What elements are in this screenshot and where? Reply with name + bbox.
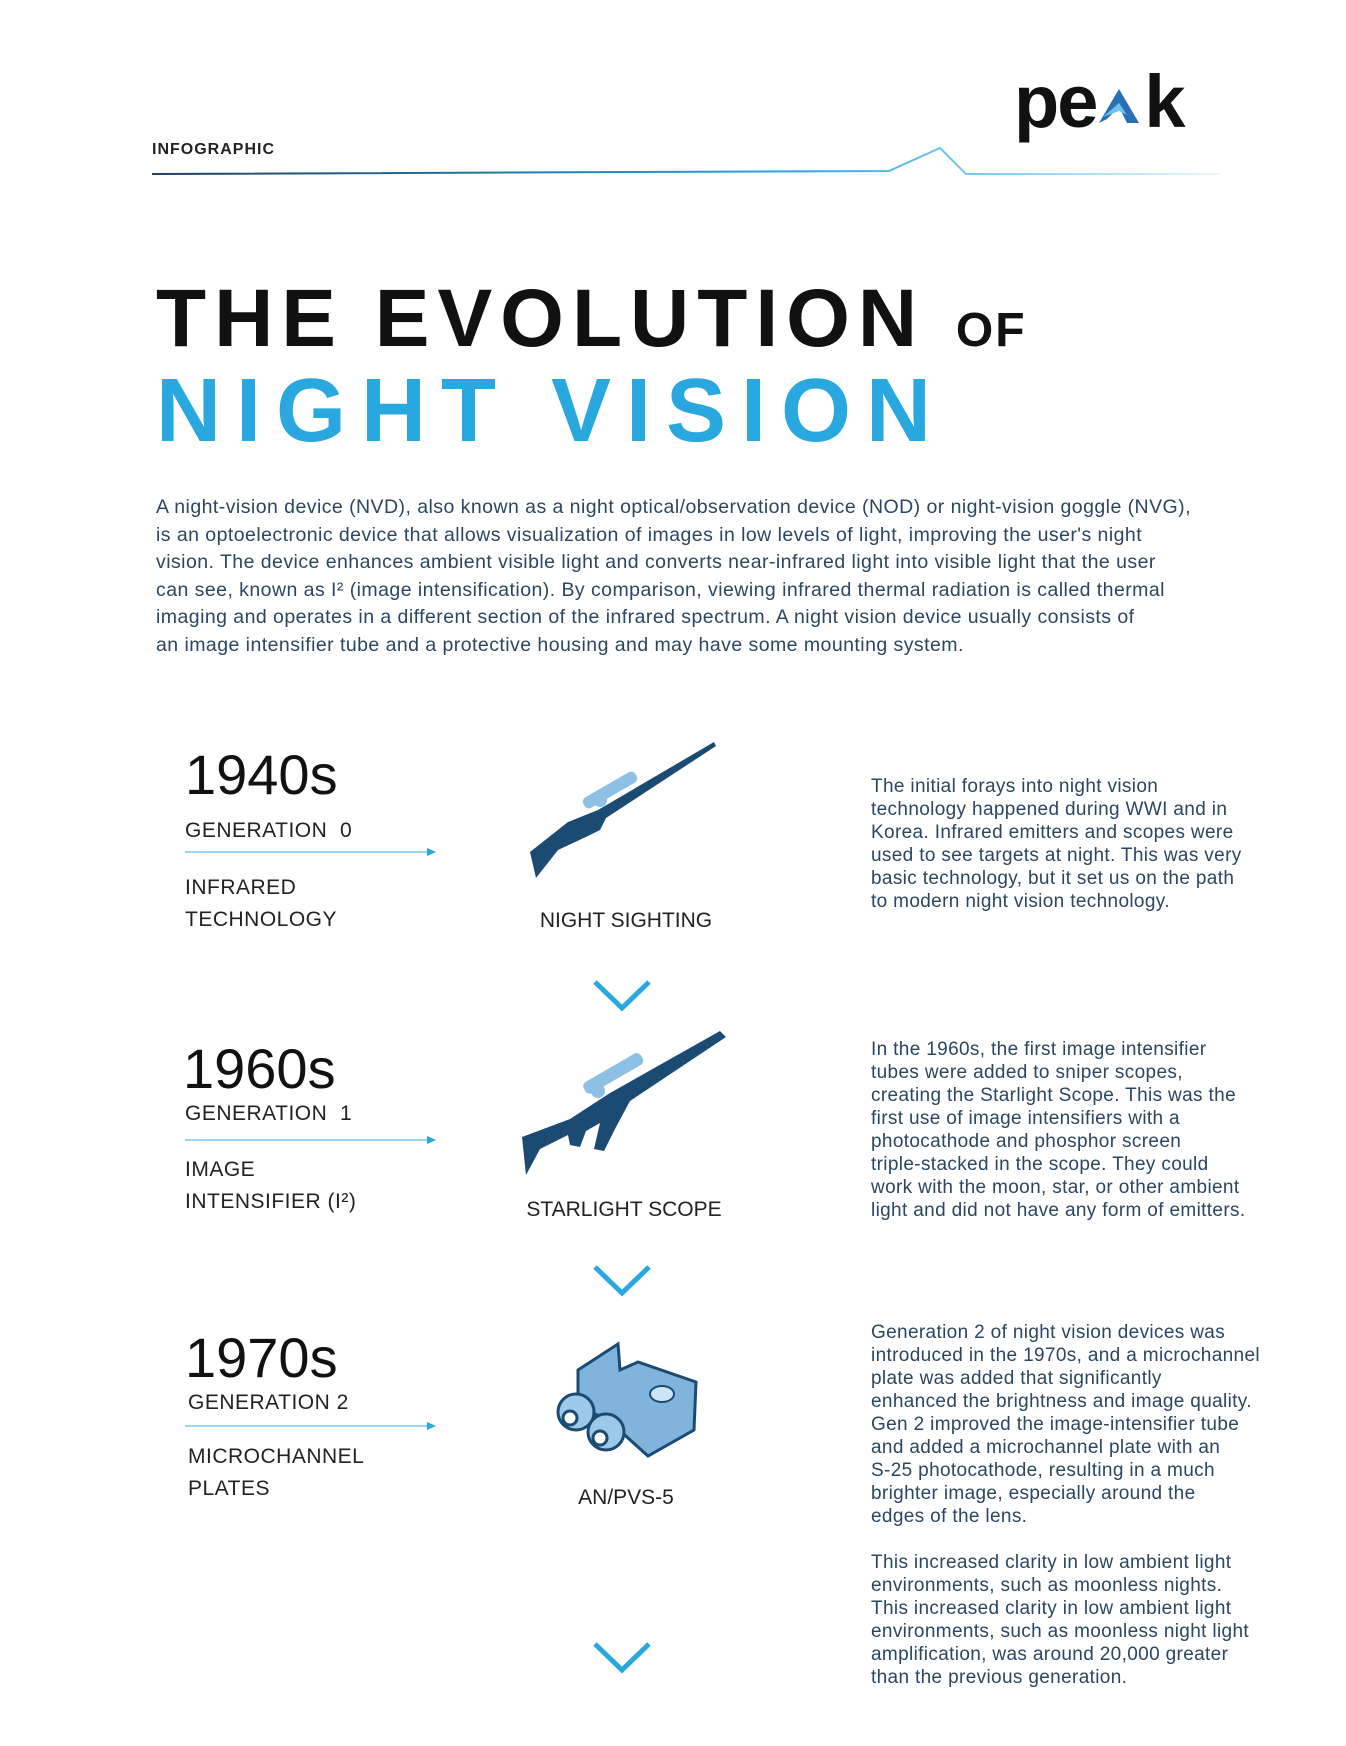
logo: peak: pe k <box>1014 60 1184 143</box>
text: 1960s description: In the 1960s, the first image intensifier <box>871 1039 1206 1060</box>
text: 1960s description: triple-stacked in the scope. They could <box>871 1154 1209 1175</box>
intro paragraph: A night-vision device (NVD), also known as a night optical/observation device (NOD) or night-vision goggle (NVG), <box>156 496 1191 518</box>
text: 1970s description: than the previous generation. <box>871 1667 1127 1688</box>
text: 1970s description: introduced in the 1970s, and a microchannel <box>871 1345 1260 1366</box>
panel: 1970s: 1970s <box>185 1326 338 1389</box>
icon: night sighting rifle <box>530 742 716 878</box>
text: 1940s description: to modern night vision technology. <box>871 891 1170 912</box>
text: 1960s description: creating the Starlight Scope. This was the <box>871 1085 1236 1106</box>
label: infographic: INFOGRAPHIC <box>152 141 275 158</box>
text: 1960s description <box>871 1039 1245 1221</box>
intro paragraph <box>156 496 1191 656</box>
arrow <box>185 1136 436 1144</box>
panel: 1960s <box>183 1037 436 1213</box>
title: THE EVOLUTION OF <box>156 273 1027 364</box>
panel: 1940s: 1940s <box>185 743 338 806</box>
panel: 1970s <box>185 1326 436 1500</box>
icon: starlight scope rifle <box>522 1031 726 1175</box>
text: 1970s description: This increased clarity in low ambient light <box>871 1598 1231 1619</box>
arrow <box>185 1422 436 1430</box>
header line with peak <box>152 146 1220 175</box>
title <box>156 273 1027 461</box>
text: 1960s description: tubes were added to sniper scopes, <box>871 1062 1183 1083</box>
panel: 1970s: PLATES <box>188 1477 270 1500</box>
text: 1960s description: photocathode and phosphor screen <box>871 1131 1181 1152</box>
text: 1970s description: S-25 photocathode, resulting in a much <box>871 1460 1215 1481</box>
intro paragraph: can see, known as I² (image intensification). By comparison, viewing infrared thermal radiation is called thermal <box>156 578 1165 600</box>
text: 1970s description: environments, such as moonless nights. <box>871 1575 1222 1596</box>
caption: AN/PVS-5: AN/PVS-5 <box>578 1486 674 1509</box>
panel: 1940s: INFRARED <box>185 876 296 899</box>
text: 1940s description: technology happened during WWI and in <box>871 799 1227 820</box>
text: 1960s description: first use of image intensifiers with a <box>871 1108 1180 1129</box>
text: 1970s description: amplification, was around 20,000 greater <box>871 1644 1228 1665</box>
intro paragraph: imaging and operates in a different section of the infrared spectrum. A night vision device usually consists of <box>156 606 1135 628</box>
panel: 1960s: 1960s <box>183 1037 336 1100</box>
arrow: chevron 3 <box>593 1642 651 1674</box>
text: 1940s description <box>871 776 1242 912</box>
arrow: chevron 1 <box>593 980 651 1012</box>
text: 1970s description: Gen 2 improved the image-intensifier tube <box>871 1414 1239 1435</box>
panel: 1960s: INTENSIFIER (I²) <box>185 1190 356 1213</box>
panel: 1960s: GENERATION 1 <box>185 1102 352 1125</box>
intro paragraph: vision. The device enhances ambient visible light and converts near-infrared light into visible light that the user <box>156 551 1156 573</box>
text: 1960s description: work with the moon, star, or other ambient <box>871 1177 1239 1198</box>
caption: starlight scope: STARLIGHT SCOPE <box>526 1198 722 1221</box>
text: 1970s description: environments, such as moonless night light <box>871 1621 1249 1642</box>
panel: 1940s: GENERATION 0 <box>185 819 352 842</box>
icon: AN/PVS-5 goggles <box>556 1341 698 1458</box>
panel: 1970s: GENERATION 2 <box>188 1391 349 1414</box>
text: 1940s description: basic technology, but it set us on the path <box>871 868 1234 889</box>
text: 1970s description: enhanced the brightness and image quality. <box>871 1391 1252 1412</box>
text: 1970s description: and added a microchannel plate with an <box>871 1437 1220 1458</box>
title: NIGHT VISION <box>156 361 946 461</box>
panel: 1970s: MICROCHANNEL <box>188 1445 364 1468</box>
text: 1970s description: This increased clarity in low ambient light <box>871 1552 1231 1573</box>
text: 1970s description: plate was added that significantly <box>871 1368 1162 1389</box>
caption: night sighting: NIGHT SIGHTING <box>540 909 712 932</box>
panel: 1960s: IMAGE <box>185 1158 255 1181</box>
text: 1940s description: used to see targets at night. This was very <box>871 845 1242 866</box>
text: 1970s description: brighter image, especially around the <box>871 1483 1196 1504</box>
text: 1940s description: Korea. Infrared emitters and scopes were <box>871 822 1234 843</box>
arrow <box>185 848 436 856</box>
text: 1970s description: edges of the lens. <box>871 1506 1027 1527</box>
arrow: chevron 2 <box>593 1265 651 1296</box>
text: 1970s description <box>871 1322 1260 1688</box>
text: 1940s description: The initial forays into night vision <box>871 776 1158 797</box>
text: 1960s description: light and did not have any form of emitters. <box>871 1200 1245 1221</box>
text: 1970s description: Generation 2 of night vision devices was <box>871 1322 1225 1343</box>
panel: 1940s: TECHNOLOGY <box>185 908 337 931</box>
panel: 1940s <box>185 743 436 931</box>
intro paragraph: is an optoelectronic device that allows visualization of images in low levels of light, improving the user's night <box>156 524 1142 546</box>
intro paragraph: an image intensifier tube and a protective housing and may have some mounting system. <box>156 634 964 656</box>
